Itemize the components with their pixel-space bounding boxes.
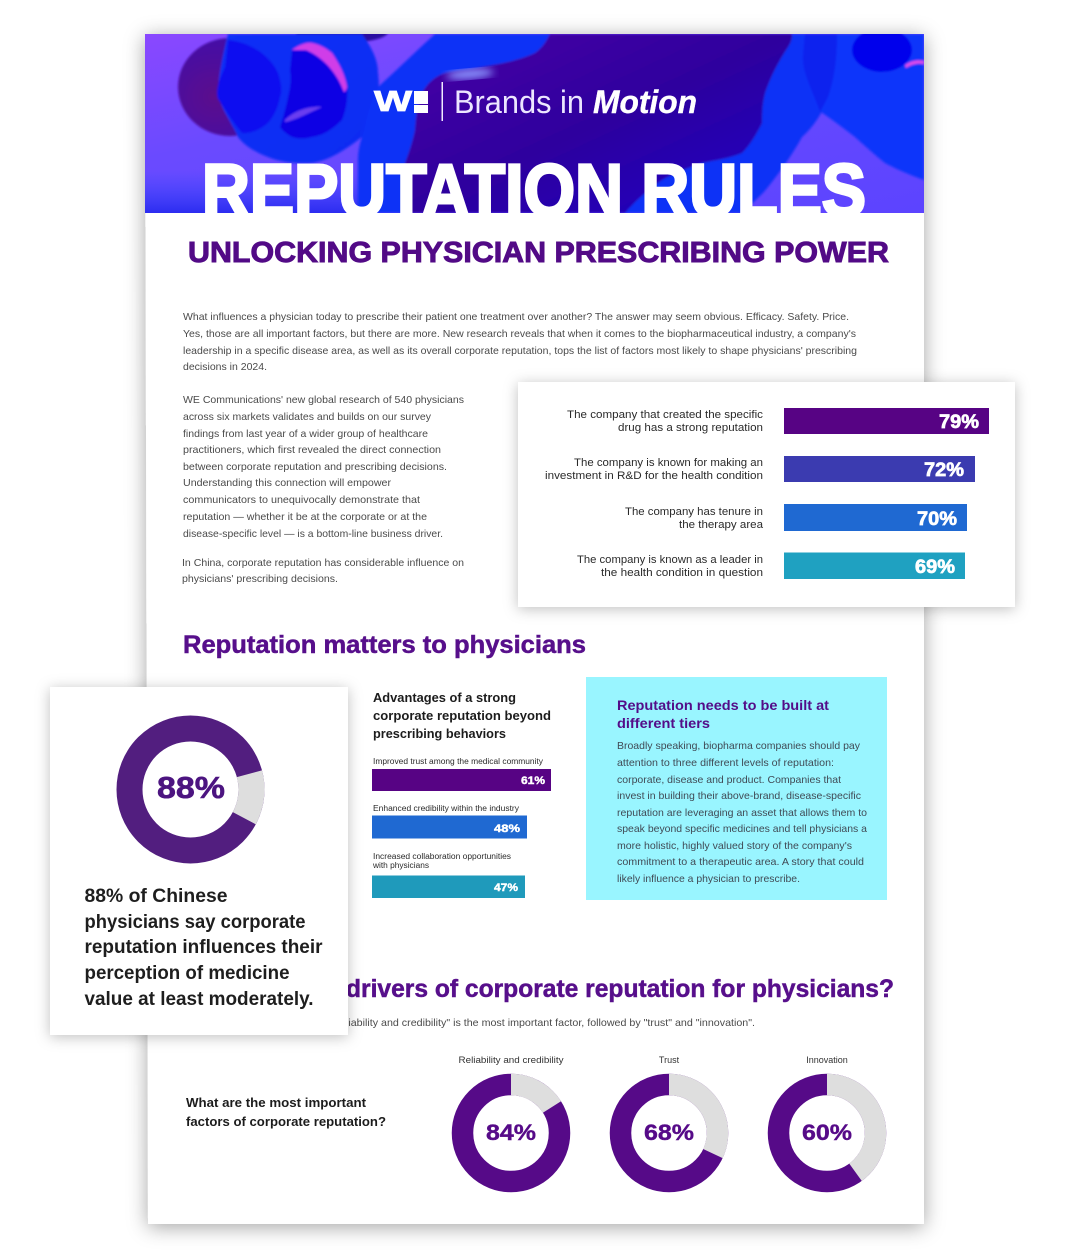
bar row 70%: The company has tenure in bbox=[625, 506, 763, 518]
Brands in Motion wordmark bbox=[456, 89, 696, 114]
advantages heading: prescribing behaviors bbox=[373, 726, 506, 741]
callout text bbox=[84, 886, 323, 1010]
tiers body text: Broadly speaking, biopharma companies should pay bbox=[617, 740, 861, 752]
drivers intro sentence: "re bbox=[332, 1017, 346, 1029]
bar 47% bbox=[372, 852, 525, 898]
subtitle: UNLOCKING PHYSICIAN PRESCRIBING POWER bbox=[188, 237, 889, 269]
intro paragraph: decisions in 2024. bbox=[183, 361, 267, 373]
donut: innovation 60%: 60% bbox=[802, 1120, 852, 1145]
research paragraph: reputation — whether it be at the corporate or at the bbox=[183, 511, 427, 523]
tiers body text: commitment to a therapeutic area. A story that could bbox=[617, 856, 864, 868]
bar row 69%: The company is known as a leader in bbox=[577, 554, 763, 566]
tiers body text: likely influence a physician to prescribe. bbox=[617, 873, 800, 885]
logo divider bbox=[442, 82, 443, 121]
Brands in Motion wordmark: Brands in bbox=[454, 84, 584, 120]
callout text: 88% of Chinese bbox=[84, 886, 228, 907]
bar row 70%: the therapy area bbox=[679, 519, 764, 531]
advantages heading: corporate reputation beyond bbox=[373, 708, 551, 723]
bar row 79% bbox=[567, 408, 989, 434]
WE mark bbox=[373, 90, 428, 113]
logo bbox=[374, 82, 697, 121]
donut: innovation 60%: Innovation bbox=[806, 1055, 848, 1065]
bar 61%: 61% bbox=[521, 775, 545, 787]
bar 47%: with physicians bbox=[372, 861, 429, 870]
bar row 69% bbox=[577, 552, 965, 579]
donut: trust 68%: Trust bbox=[659, 1055, 680, 1065]
intro paragraph bbox=[183, 311, 857, 373]
bar row 79%: The company that created the specific bbox=[567, 409, 764, 421]
bar 48%: Enhanced credibility within the industry bbox=[373, 804, 519, 813]
research paragraph: findings from last year of a wider group of healthcare bbox=[183, 428, 428, 440]
blob highlight bbox=[446, 67, 494, 81]
intro paragraph: What influences a physician today to prescribe their patient one treatment over another? The answer may seem obvious. Efficacy. Safety. Price. bbox=[183, 311, 849, 323]
advantages heading bbox=[373, 690, 551, 741]
bar row 72% bbox=[545, 456, 975, 482]
tiers body text: invest in building their above-brand, disease-specific bbox=[617, 790, 861, 802]
panel: reputation factors bar chart bbox=[518, 382, 1015, 607]
bar row 69%: 69% bbox=[915, 557, 955, 578]
WE mark: W bbox=[374, 86, 413, 118]
China paragraph: physicians' prescribing decisions. bbox=[182, 573, 338, 585]
header banner bbox=[145, 34, 924, 213]
heading: drivers of reputation: What are the key bbox=[183, 975, 338, 1003]
research paragraph: Understanding this connection will empower bbox=[183, 477, 392, 489]
tiers body text: speak beyond specific medicines and tell physicians a bbox=[617, 823, 867, 835]
bar row 79%: 79% bbox=[939, 412, 979, 433]
donut: trust 68% bbox=[620, 1055, 718, 1182]
donut: reliability and credibility 84%: Reliability and credibility bbox=[458, 1055, 564, 1065]
donut: reliability and credibility 84% bbox=[458, 1055, 564, 1182]
bar row 69%: the health condition in question bbox=[601, 567, 763, 579]
research paragraph: practitioners, which first revealed the direct connection bbox=[183, 444, 441, 456]
intro paragraph: Yes, those are all important factors, but there are more. New research reveals that when it comes to the biopharmaceutical industry, a company's bbox=[183, 328, 856, 340]
research paragraph: WE Communications' new global research of 540 physicians bbox=[183, 394, 464, 406]
research paragraph bbox=[183, 394, 464, 540]
China paragraph: In China, corporate reputation has considerable influence on bbox=[182, 557, 464, 569]
donut chart 88%: 88% bbox=[157, 770, 225, 805]
advantages chart bbox=[372, 690, 551, 898]
question text: factors of corporate reputation? bbox=[186, 1114, 386, 1129]
bar 61% bbox=[372, 757, 551, 791]
panel: 88% callout card bbox=[50, 687, 348, 1035]
question text: What are the most important bbox=[186, 1095, 367, 1110]
bar row 70% bbox=[625, 504, 967, 531]
donut: trust 68%: 68% bbox=[644, 1120, 694, 1145]
title: REPUTATION RULES bbox=[202, 149, 866, 232]
callout text: reputation influences their bbox=[84, 937, 323, 958]
tiers body text: more holistic, highly valued story of the company's bbox=[617, 840, 852, 852]
donut: reliability and credibility 84%: 84% bbox=[486, 1120, 536, 1145]
bar row 70%: 70% bbox=[917, 509, 957, 530]
tiers heading bbox=[617, 697, 829, 731]
bar 47%: 47% bbox=[494, 882, 518, 894]
research paragraph: communicators to unequivocally demonstrate that bbox=[183, 494, 420, 506]
China paragraph bbox=[182, 557, 464, 585]
intro paragraph: leadership in a specific disease area, as well as its overall corporate reputation, tops the list of factors most likely to shape physicians' prescribing bbox=[183, 345, 857, 357]
research paragraph: disease-specific level — is a bottom-line business driver. bbox=[183, 528, 443, 540]
bar row 72%: The company is known for making an bbox=[574, 457, 763, 469]
tiers heading: different tiers bbox=[617, 715, 710, 731]
bar row 72%: investment in R&D for the health condition bbox=[545, 470, 763, 482]
page sheet bbox=[145, 34, 924, 1224]
donut: innovation 60% bbox=[778, 1055, 876, 1182]
tiers heading: Reputation needs to be built at bbox=[617, 697, 829, 713]
heading: reputation matters: Reputation matters to physicians bbox=[183, 631, 586, 659]
donut chart 88% bbox=[130, 728, 252, 850]
bar 47%: Increased collaboration opportunities bbox=[373, 852, 511, 861]
bar 48%: 48% bbox=[494, 823, 520, 835]
callout text: perception of medicine bbox=[84, 963, 290, 984]
bar 48% bbox=[372, 804, 527, 838]
panel: reputation tiers bbox=[586, 677, 887, 900]
tiers body text: corporate, disease and product. Companies that bbox=[617, 774, 841, 786]
Brands in Motion wordmark: Motion bbox=[593, 84, 697, 120]
tiers body text bbox=[617, 740, 867, 885]
callout text: value at least moderately. bbox=[84, 989, 314, 1010]
drivers intro sentence: liability and credibility" is the most important factor, followed by "trust" and "innovation". bbox=[346, 1017, 755, 1029]
advantages heading: Advantages of a strong bbox=[373, 690, 516, 705]
abstract blobs artwork bbox=[178, 21, 924, 213]
bar row 72%: 72% bbox=[924, 460, 964, 481]
research paragraph: across six markets validates and builds on our survey bbox=[183, 411, 432, 423]
callout text: physicians say corporate bbox=[84, 912, 306, 933]
tiers body text: reputation are leveraging an asset that allows them to bbox=[617, 807, 867, 819]
bar row 79%: drug has a strong reputation bbox=[618, 422, 763, 434]
tiers body text: attention to three different levels of reputation: bbox=[617, 757, 834, 769]
question text bbox=[186, 1095, 386, 1129]
heading: drivers of reputation: drivers of corporate reputation for physicians? bbox=[346, 975, 894, 1003]
bar 61%: Improved trust among the medical community bbox=[373, 757, 543, 766]
research paragraph: between corporate reputation and prescribing decisions. bbox=[183, 461, 447, 473]
